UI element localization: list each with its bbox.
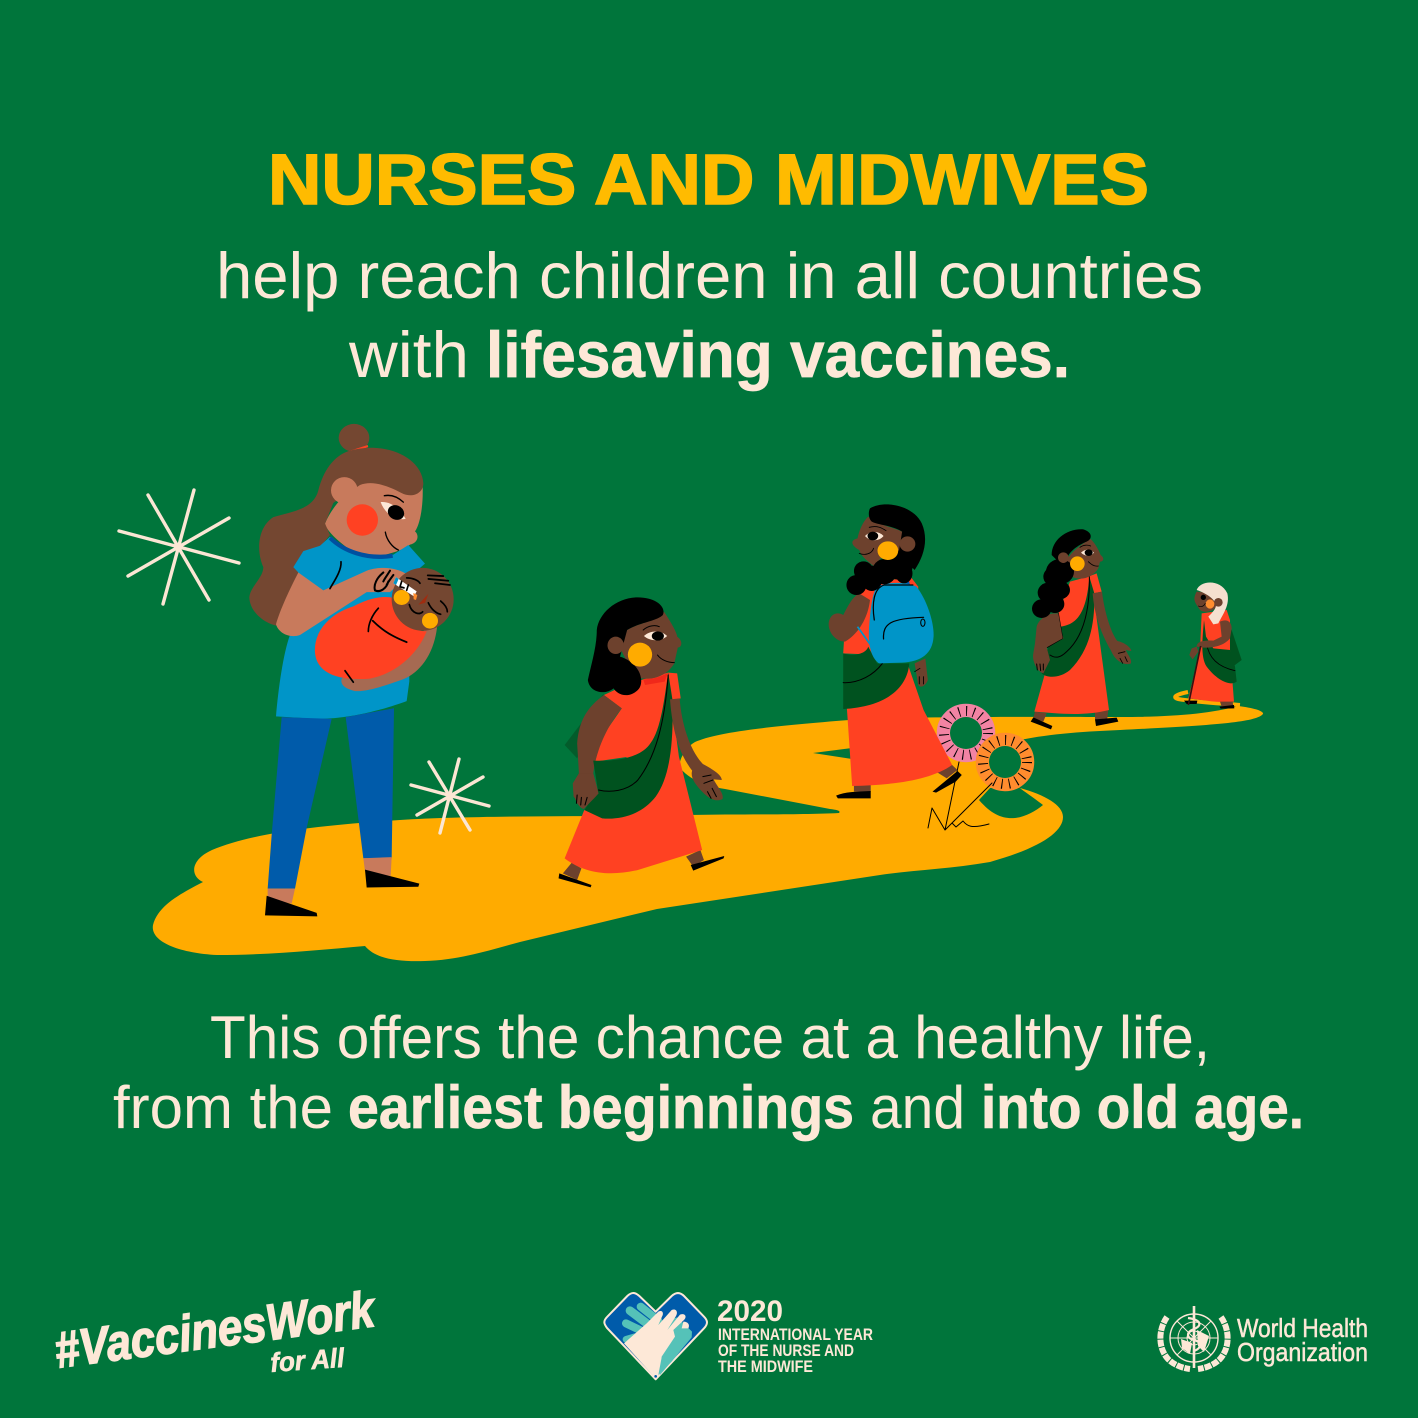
closing text block: and [870, 1074, 965, 1141]
sparkle star small [411, 759, 489, 833]
nurse holding baby [249, 424, 454, 916]
flower: orange [982, 740, 1028, 784]
subtitle text block [216, 239, 1203, 391]
elderly woman with cane [1184, 583, 1242, 709]
logo: VaccinesWork for All: #VaccinesWork [51, 1280, 380, 1379]
stems and grass [928, 762, 992, 830]
path inlets [813, 748, 1043, 818]
flowers [928, 710, 1028, 830]
title: NURSES AND MIDWIVES [268, 141, 1149, 220]
text: 2020 international year [717, 1295, 873, 1376]
text: 2020 international year: INTERNATIONAL YEAR [718, 1326, 873, 1344]
text: World Health Organization [1237, 1313, 1368, 1367]
text: 2020 international year: 2020 [717, 1295, 783, 1328]
logo: World Health Organization [1160, 1306, 1368, 1369]
subtitle text block: lifesaving vaccines. [486, 318, 1070, 391]
illustration: journey through life [119, 424, 1263, 961]
flower: pink [944, 710, 988, 756]
closing text block: This offers the chance at a healthy life, [210, 1004, 1210, 1071]
subtitle text block: with [348, 318, 469, 391]
closing text block: into old age. [981, 1074, 1304, 1141]
text: World Health Organization: World Health [1237, 1313, 1368, 1343]
icon: heart with hands [604, 1293, 707, 1379]
logo: Year of the Nurse and Midwife [604, 1293, 873, 1379]
young girl walking [559, 597, 724, 887]
text: 2020 international year: OF THE NURSE AND [718, 1342, 854, 1360]
subtitle text block: help reach children in all countries [216, 239, 1203, 312]
sparkle star large [119, 490, 239, 604]
text: World Health Organization: Organization [1237, 1337, 1368, 1367]
woman walking with braid [1031, 529, 1131, 729]
logo: VaccinesWork for All: for All [269, 1343, 346, 1378]
icon: WHO emblem [1160, 1306, 1228, 1369]
yellow winding path [153, 692, 1263, 961]
text: 2020 international year: THE MIDWIFE [718, 1358, 813, 1376]
closing text block [113, 1004, 1304, 1141]
closing text block: from the [113, 1074, 333, 1141]
woman with backpack [829, 504, 962, 798]
closing text block: earliest beginnings [348, 1074, 854, 1141]
